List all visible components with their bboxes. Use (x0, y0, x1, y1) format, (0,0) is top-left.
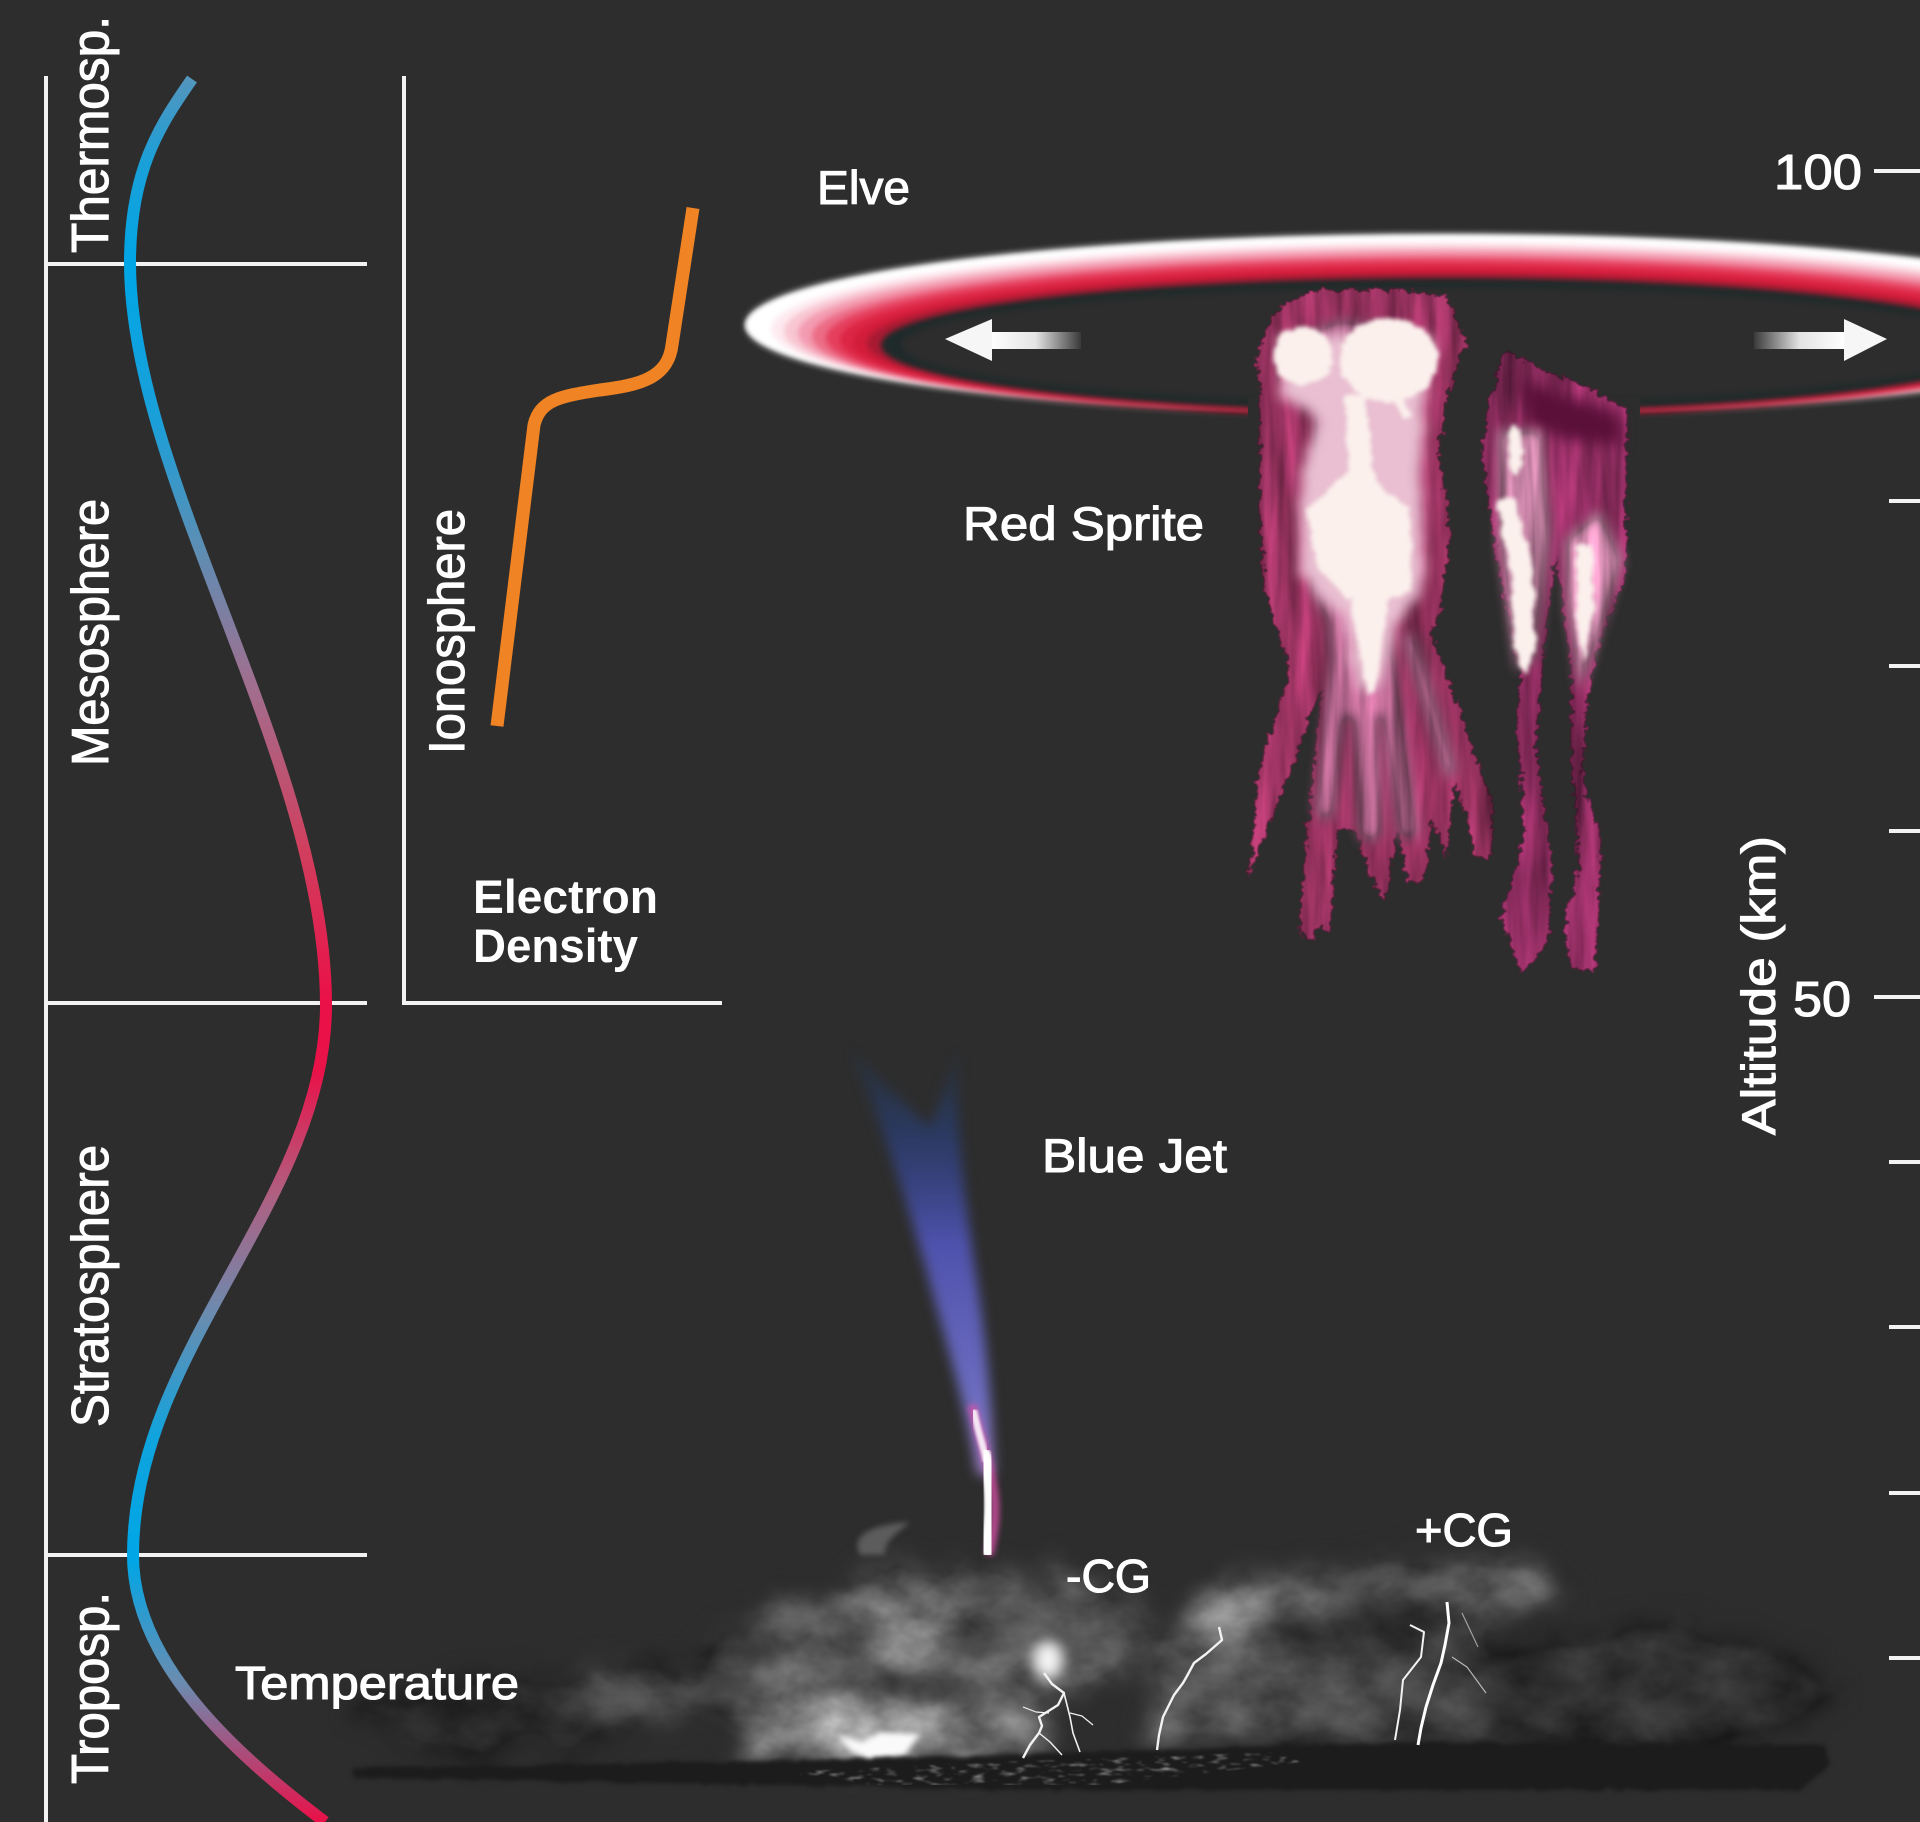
label: Troposphere: Troposp. (62, 1592, 120, 1784)
elve ring (741, 231, 1920, 428)
tick label: 100: 100 (1774, 146, 1862, 200)
ground silhouette (352, 1742, 1830, 1790)
label: Mesosphere: Mesosphere (62, 499, 120, 766)
ground lights (780, 1752, 1300, 1785)
axis title: Altitude (km): Altitude (km) (1732, 836, 1785, 1135)
altitude scale (1732, 146, 1920, 1658)
label: Stratosphere: Stratosphere (62, 1145, 120, 1427)
arrow: right outward (1754, 319, 1887, 361)
label: Thermosphere: Thermosp. (62, 16, 120, 253)
thunderstorm cloud (350, 1522, 1830, 1790)
label: -CG: -CG (1066, 1550, 1151, 1602)
chart: electron density curve (497, 208, 693, 726)
panel: electron density axis (402, 76, 722, 1003)
ground glow (838, 1732, 920, 1760)
label: Blue Jet: Blue Jet (1042, 1129, 1227, 1182)
label: Ionosphere: Ionosphere (419, 509, 475, 754)
label: +CG: +CG (1415, 1504, 1513, 1556)
label: Red Sprite: Red Sprite (963, 497, 1204, 550)
tick label: 50: 50 (1793, 973, 1851, 1027)
label: Electron Density: Density (473, 919, 638, 972)
label: Electron Density: Electron (473, 870, 658, 923)
panel: atmosphere layers axis (46, 76, 367, 1822)
lightning bolts (1023, 1602, 1486, 1758)
cloud flash glow (1032, 1640, 1064, 1680)
chart: temperature curve (130, 79, 326, 1822)
red sprite: large plume (1248, 290, 1494, 940)
blue jet (850, 1050, 995, 1555)
arrow: left outward (945, 319, 1081, 361)
red sprite: small plume (1482, 350, 1626, 973)
label: Elve: Elve (817, 161, 910, 214)
label: Temperature: Temperature (235, 1657, 519, 1709)
label: Electron Density (473, 870, 658, 972)
